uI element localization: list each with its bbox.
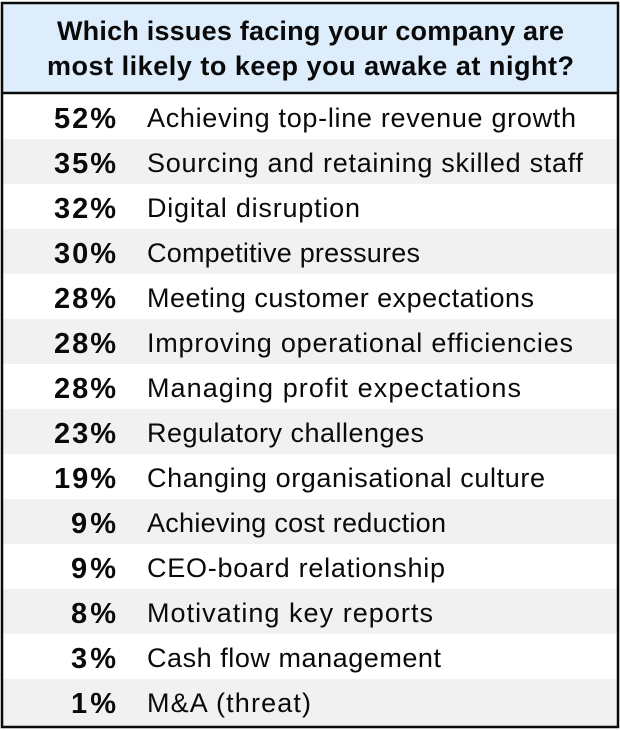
row 4: 30% (54, 238, 116, 270)
row 4 (54, 238, 420, 270)
row 2: 35% (54, 148, 116, 180)
row 9: 19% (54, 463, 116, 495)
row 4: Competitive pressures (147, 238, 420, 268)
row 5: Meeting customer expectations (147, 283, 534, 313)
row 8: Regulatory challenges (147, 418, 424, 448)
row 3 (54, 193, 360, 225)
row 2: Sourcing and retaining skilled staff (147, 148, 583, 178)
panel: title header: Which issues facing your company are (57, 16, 564, 46)
row 3: Digital disruption (147, 193, 360, 223)
row 11: 9% (71, 553, 116, 585)
row 7: 28% (54, 373, 116, 405)
row 1: Achieving top-line revenue growth (147, 103, 576, 133)
row 14: 1% (71, 688, 116, 720)
row 9: Changing organisational culture (147, 463, 545, 493)
row 14: M&A (threat) (147, 688, 311, 718)
row 5: 28% (54, 283, 116, 315)
row 7: Managing profit expectations (147, 373, 521, 403)
row 8: 23% (54, 418, 116, 450)
row 1: 52% (54, 103, 116, 135)
row 6: Improving operational efficiencies (147, 328, 573, 358)
row 12: 8% (71, 598, 116, 630)
row 13: 3% (71, 643, 116, 675)
row 6: 28% (54, 328, 116, 360)
row 11: CEO-board relationship (147, 553, 445, 583)
row 10: 9% (71, 508, 116, 540)
row 13: Cash flow management (147, 643, 441, 673)
panel: title header: most likely to keep you awake at night? (47, 51, 574, 81)
row 12: Motivating key reports (147, 598, 433, 628)
panel: title header (2, 3, 618, 93)
row 10: Achieving cost reduction (147, 508, 446, 538)
row 14 (71, 688, 311, 720)
row 3: 32% (54, 193, 116, 225)
